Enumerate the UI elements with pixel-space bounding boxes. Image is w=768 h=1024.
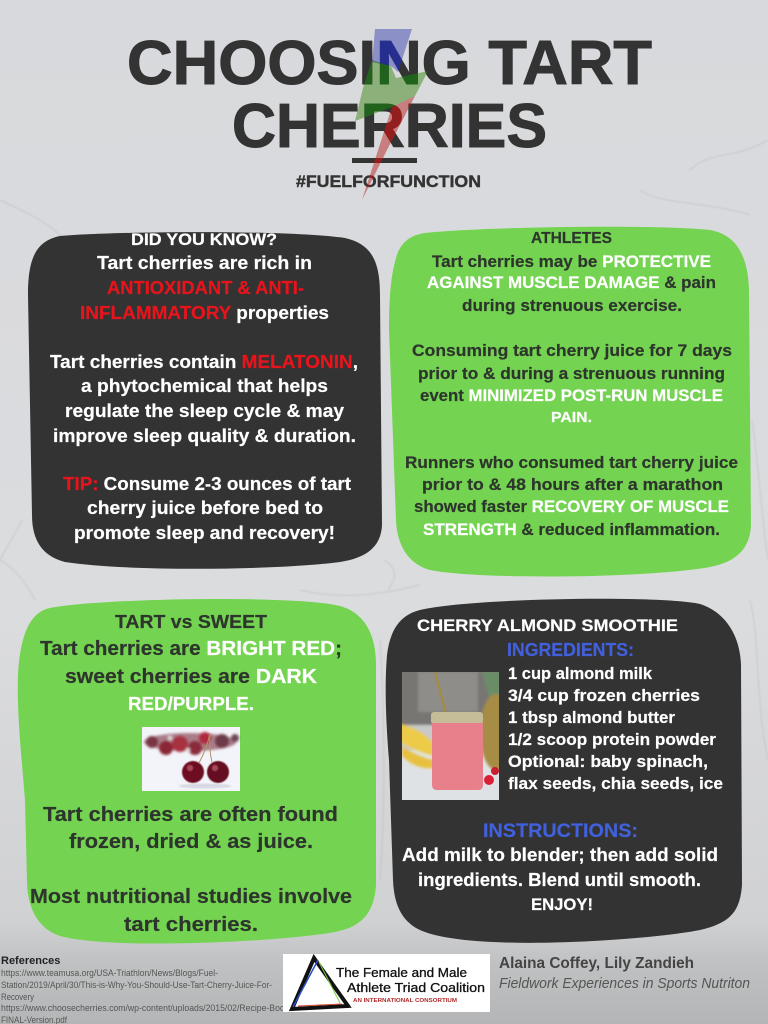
text block: seven days: prior to & during a strenuous running	[418, 365, 725, 383]
text block: ingredients list: 1 tbsp almond butter	[508, 709, 676, 727]
text block: seven days: Consuming tart cherry juice for 7 days	[412, 342, 732, 360]
text block: colour difference: RED/PURPLE.	[128, 693, 254, 714]
text block: tip: cherry juice before bed to	[87, 498, 323, 518]
logo text: AN INTERNATIONAL CONSORTIUM	[353, 998, 457, 1004]
hashtag: #FUELFORFUNCTION	[296, 172, 481, 191]
text block: nutritional studies: tart cherries.	[124, 914, 258, 936]
text block: ingredients list: 1 cup almond milk	[508, 665, 653, 683]
text block: seven days	[412, 342, 732, 426]
heading: did you know: DID YOU KNOW?	[131, 230, 277, 249]
text block: antioxidant properties	[80, 253, 329, 323]
course name: Fieldwork Experiences in Sports Nutriton	[499, 975, 750, 992]
heading: ingredients: INGREDIENTS:	[507, 640, 634, 660]
references: Recovery	[1, 992, 34, 1002]
text block: protective: Tart cherries may be PROTECTIVE	[432, 253, 711, 271]
text block: antioxidant properties: Tart cherries are rich in	[97, 253, 312, 273]
logo text: The Female and Male	[336, 966, 467, 980]
text block: ingredients list: Optional: baby spinach,	[508, 753, 708, 771]
text block: instructions	[402, 845, 718, 914]
logo text: Athlete Triad Coalition	[347, 981, 485, 995]
text block: antioxidant properties: INFLAMMATORY properties	[80, 303, 329, 323]
text block: seven days: PAIN.	[551, 409, 592, 426]
panel: cherry almond smoothie	[386, 599, 742, 943]
panel: tart vs sweet	[18, 599, 376, 944]
text block: protective: AGAINST MUSCLE DAMAGE & pain	[427, 274, 716, 292]
text block: found frozen	[43, 804, 338, 853]
panel: did you know	[28, 230, 382, 569]
text block: colour difference: sweet cherries are DARK	[65, 666, 318, 688]
text block: melatonin: Tart cherries contain MELATONIN ,	[50, 352, 358, 372]
text block: ingredients list	[508, 665, 723, 793]
references: https://www.choosecherries.com/wp-content/uploads/2015/02/Recipe-Book-	[1, 1003, 292, 1013]
logo text	[336, 966, 485, 1004]
text block: tip	[63, 474, 351, 543]
title	[127, 29, 652, 161]
text block: protective: during strenuous exercise.	[462, 297, 682, 315]
heading: tart vs sweet: TART vs SWEET	[115, 612, 267, 632]
text block: instructions: ingredients. Blend until smooth.	[418, 870, 701, 890]
text block: found frozen: Tart cherries are often found	[43, 804, 338, 826]
heading: smoothie: CHERRY ALMOND SMOOTHIE	[417, 616, 678, 635]
icon: triangle	[292, 958, 348, 1009]
text block: colour difference	[40, 638, 342, 714]
references: References	[1, 955, 60, 967]
heading: instructions: INSTRUCTIONS:	[483, 821, 638, 842]
authors: Alaina Coffey, Lily Zandieh	[499, 955, 694, 972]
text block: nutritional studies	[30, 886, 352, 936]
text block: tip: promote sleep and recovery!	[74, 523, 335, 543]
text block: runners	[405, 454, 738, 539]
text block: runners: showed faster RECOVERY OF MUSCLE	[414, 498, 729, 516]
text block: runners: STRENGTH & reduced inflammation.	[423, 521, 720, 539]
heading: athletes: ATHLETES	[531, 230, 612, 247]
text block: found frozen: frozen, dried & as juice.	[69, 831, 313, 853]
image: smoothie jar	[402, 672, 499, 800]
text block: seven days: event MINIMIZED POST-RUN MUSCLE	[420, 387, 723, 405]
text block: ingredients list: flax seeds, chia seeds, ice	[508, 775, 723, 793]
text block: runners: Runners who consumed tart cherry juice	[405, 454, 738, 472]
text block: melatonin: a phytochemical that helps	[81, 376, 328, 396]
text block: melatonin	[50, 352, 358, 446]
text block: colour difference: Tart cherries are BRIGHT RED;	[40, 638, 342, 660]
references	[1, 955, 292, 1024]
text block: instructions: Add milk to blender; then add solid	[402, 845, 718, 865]
title: CHERRIES	[232, 92, 547, 161]
references: https://www.teamusa.org/USA-Triathlon/News/Blogs/Fuel-	[1, 968, 218, 978]
title: CHOOSING TART	[127, 29, 652, 98]
text block: instructions: ENJOY!	[531, 895, 593, 914]
text block: runners: prior to & 48 hours after a marathon	[422, 476, 723, 494]
icon: lightning bolt	[355, 29, 428, 200]
text block: melatonin: improve sleep quality & duration.	[53, 426, 356, 446]
text block: nutritional studies: Most nutritional studies involve	[30, 886, 352, 908]
text block: melatonin: regulate the sleep cycle & may	[65, 401, 344, 421]
divider rule	[352, 158, 417, 163]
panel: athletes	[389, 227, 751, 576]
text block: ingredients list: 3/4 cup frozen cherries	[508, 687, 700, 705]
image: cherries	[142, 727, 240, 791]
text block: tip: TIP: Consume 2-3 ounces of tart	[63, 474, 351, 494]
text block: protective	[427, 253, 716, 315]
text block: ingredients list: 1/2 scoop protein powder	[508, 731, 717, 749]
logo: athlete triad coalition	[283, 954, 490, 1012]
text block: antioxidant properties: ANTIOXIDANT & ANTI-	[107, 278, 304, 298]
references: Station/2019/April/30/This-is-Why-You-Should-Use-Tart-Cherry-Juice-For-	[1, 980, 272, 990]
